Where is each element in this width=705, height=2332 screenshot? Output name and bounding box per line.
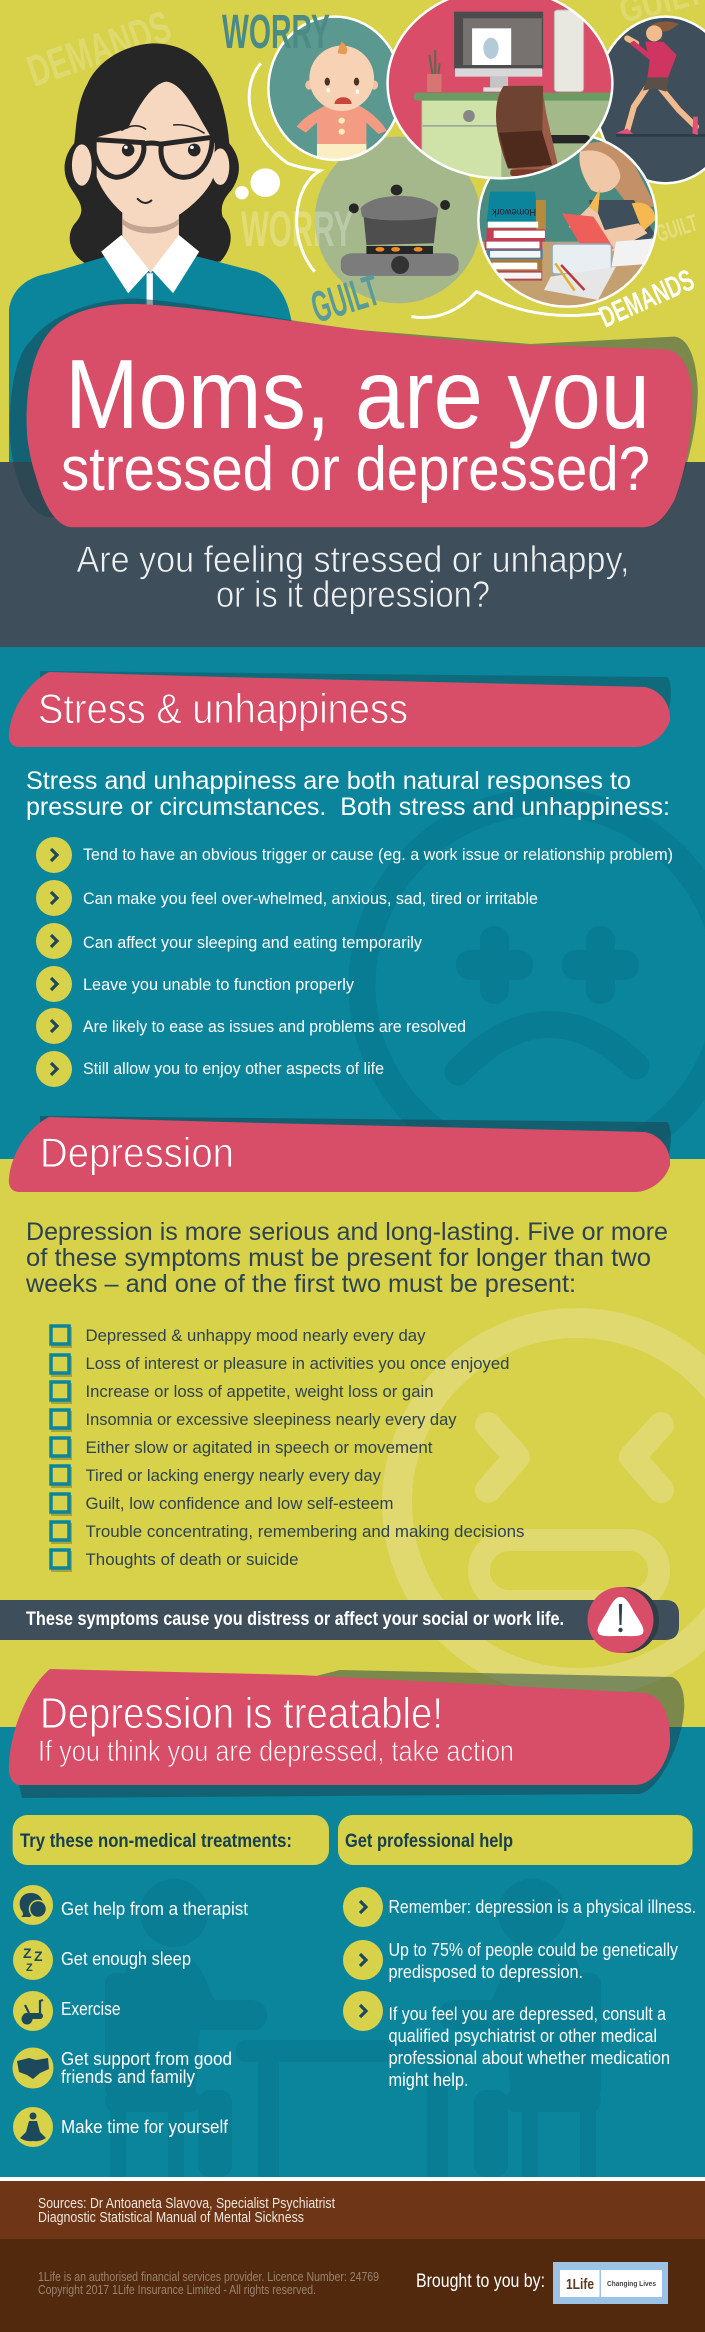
chair seat <box>499 131 552 168</box>
text: therapist: Get help from a therapist <box>61 1898 248 1919</box>
symptom items <box>86 1326 524 1569</box>
burner <box>341 253 459 276</box>
pot lid <box>361 196 438 220</box>
list: stress signs <box>36 837 673 1087</box>
open book <box>562 213 614 249</box>
footer: sources: Sources: Dr Antoaneta Slavova, Specialist Psychiatrist <box>38 2196 335 2212</box>
logo: 1Life <box>566 2276 594 2293</box>
chair back <box>496 85 558 172</box>
chevrons <box>51 849 57 1075</box>
palette on screen <box>483 38 499 59</box>
label: homework on book: Homework <box>491 206 536 217</box>
items <box>83 845 673 1078</box>
symptom items: Depressed & unhappy mood nearly every day <box>86 1326 426 1345</box>
symptom items: Increase or loss of appetite, weight loss or gain <box>86 1382 434 1401</box>
child arms <box>569 207 647 257</box>
ears <box>72 144 92 186</box>
items: Can make you feel over-whelmed, anxious, sad, tired or irritable <box>83 889 538 908</box>
logo <box>553 2262 668 2304</box>
sleeves <box>632 203 656 232</box>
intro text: depression: Depression is more serious and long-lasting. Five or more <box>26 1218 668 1246</box>
icon: handshake <box>12 2048 54 2088</box>
panel heading: professional help <box>338 1815 692 1865</box>
diaper <box>316 142 366 159</box>
help text: predisposed to depression. <box>388 1961 583 1982</box>
pot body <box>363 213 437 245</box>
pen cup <box>427 74 442 92</box>
bullets <box>36 837 72 1087</box>
panel: stress and unhappiness background <box>0 647 705 1159</box>
checklist: symptoms <box>51 1326 524 1572</box>
icon: exercise bike <box>13 1991 53 2031</box>
intro text: depression <box>25 1218 668 1298</box>
subtitle panel background <box>0 462 705 647</box>
intro text: stress <box>26 767 670 821</box>
thought dots <box>235 168 280 199</box>
intro text: depression: of these symptoms must be present for longer than two <box>26 1244 651 1272</box>
help text: If you feel you are depressed, consult a <box>388 2003 667 2024</box>
shorts <box>643 77 669 92</box>
checkboxes <box>51 1326 69 1568</box>
hero background <box>0 0 705 462</box>
collar <box>101 235 199 293</box>
symptom items: Insomnia or excessive sleepiness nearly every day <box>86 1410 457 1429</box>
footer: sources <box>0 2177 705 2239</box>
list: professional help <box>343 1887 696 2090</box>
icon: sleep: Z <box>23 1945 32 1961</box>
bubble: crying baby <box>268 17 401 162</box>
help text: might help. <box>388 2069 468 2090</box>
shirt <box>629 41 677 78</box>
child shirt <box>589 200 654 243</box>
thought bubble outline <box>249 63 600 318</box>
bullets <box>343 1887 383 2031</box>
panel: depression background <box>0 1159 705 1727</box>
tuft <box>338 42 347 54</box>
symptom items: Guilt, low confidence and low self-esteem <box>86 1494 394 1513</box>
word: guilt teal: GUILT <box>306 266 385 333</box>
illustration: mother and thought bubbles <box>9 0 705 500</box>
heading banner: stress and unhappiness <box>9 671 671 747</box>
intro text: stress: Stress and unhappiness are both natural responses to <box>26 767 631 795</box>
placket <box>147 273 153 307</box>
tablet and papers <box>552 244 611 274</box>
legal text: 1Life is an authorised financial services provider. Licence Number: 24769 <box>38 2269 379 2284</box>
text: exercise: Exercise <box>61 1998 120 2019</box>
items: Are likely to ease as issues and problems are resolved <box>83 1017 466 1036</box>
hair <box>647 21 679 40</box>
legal text <box>38 2269 379 2297</box>
list: non-medical treatments <box>12 1885 248 2147</box>
chevrons <box>360 1901 366 2017</box>
subtitle: or is it depression? <box>216 574 490 615</box>
mother figure <box>9 43 291 500</box>
help text: qualified psychiatrist or other medical <box>388 2025 657 2046</box>
symptom items: Either slow or agitated in speech or movement <box>86 1438 433 1457</box>
subheading text: If you think you are depressed, take action <box>38 1735 514 1768</box>
baby head <box>309 46 374 111</box>
title banner <box>10 298 698 527</box>
shirt <box>9 257 291 500</box>
top teal book <box>486 192 540 223</box>
subtitle <box>76 539 630 615</box>
bubble: runner <box>596 17 705 183</box>
eye highlights <box>124 146 194 149</box>
shoes <box>616 128 633 134</box>
child hair <box>580 142 656 207</box>
help text <box>388 1896 696 2090</box>
panel: treatment background <box>0 1727 705 2177</box>
sponsor text: Brought to you by: <box>416 2271 545 2292</box>
heading text: Stress & unhappiness <box>38 685 408 732</box>
logo: Changing Lives <box>607 2279 656 2288</box>
neck <box>122 207 179 273</box>
icon: meditation <box>13 2107 53 2147</box>
footer: legal and sponsor <box>0 2239 705 2332</box>
text: support: friends and family <box>61 2066 196 2087</box>
monitor <box>454 12 543 69</box>
desk body <box>421 100 502 178</box>
text: support <box>61 2048 232 2087</box>
hair <box>65 43 239 265</box>
icon: sleep <box>13 1940 53 1980</box>
text: sleep: Get enough sleep <box>61 1948 191 1969</box>
glasses <box>92 137 212 177</box>
symptom items: Trouble concentrating, remembering and making decisions <box>86 1522 524 1541</box>
symptom items: Thoughts of death or suicide <box>86 1550 298 1569</box>
icon: sleep: Z <box>26 1962 33 1974</box>
pencils <box>555 263 575 291</box>
panel heading: professional help: Get professional help <box>345 1831 513 1852</box>
chair arm <box>551 135 590 144</box>
runner head <box>646 25 662 41</box>
drawer knob <box>463 110 475 122</box>
text: support: Get support from good <box>61 2048 232 2069</box>
banner shape <box>10 298 698 527</box>
face <box>97 82 215 229</box>
watermark: sad face <box>362 802 705 1168</box>
neck shadow <box>122 218 179 233</box>
icon: therapist speech bubbles <box>13 1885 53 1925</box>
intro text: stress: pressure or circumstances. Both stress and unhappiness: <box>26 793 670 821</box>
child face <box>579 150 620 193</box>
title line 2: stressed or depressed? <box>61 435 650 504</box>
baby ears <box>305 80 311 90</box>
items: Still allow you to enjoy other aspects of life <box>83 1059 384 1078</box>
bubble: desk and computer <box>388 0 618 187</box>
eyebrows and mouth <box>121 125 205 203</box>
help text: professional about whether medication <box>388 2047 670 2068</box>
items: Can affect your sleeping and eating temporarily <box>83 933 422 952</box>
icon: sleep: Z <box>34 1948 43 1964</box>
eyes <box>122 144 201 156</box>
intro text: depression: weeks – and one of the first two must be present: <box>25 1270 576 1298</box>
flames <box>375 247 423 252</box>
callout text: These symptoms cause you distress or affect your social or work life. <box>26 1609 564 1630</box>
computer tower <box>554 10 584 92</box>
watermark: face with chevrons <box>397 1323 705 1683</box>
symptom items: Tired or lacking energy nearly every day <box>86 1466 381 1485</box>
baby body <box>297 106 387 144</box>
items: Tend to have an obvious trigger or cause (eg. a work issue or relationship problem) <box>83 845 673 864</box>
watermark: two people at a table <box>105 1879 601 2177</box>
bubble: cooking pot <box>315 137 481 303</box>
icon: warning <box>588 1587 659 1653</box>
desk top <box>414 93 616 101</box>
checkbox shadows <box>51 1327 72 1572</box>
book stack <box>486 228 545 242</box>
heading text: Depression <box>40 1129 234 1176</box>
text: make time: Make time for yourself <box>61 2116 229 2137</box>
ghost word: worry: WORRY <box>241 201 353 257</box>
table <box>482 242 642 306</box>
word: worry teal: WORRY <box>222 6 330 59</box>
heading banner: depression <box>9 1116 671 1192</box>
callout bar: distress <box>0 1587 679 1653</box>
footer: sources: Diagnostic Statistical Manual of Mental Sickness <box>38 2210 304 2226</box>
legal text: Copyright 2017 1Life Insurance Limited - All rights reserved. <box>38 2282 316 2297</box>
bubble: child reading <box>477 133 661 308</box>
monitor stand <box>490 77 508 87</box>
buttons <box>339 118 345 124</box>
subtitle: Are you feeling stressed or unhappy, <box>76 539 630 580</box>
ground <box>616 134 705 137</box>
symptom items: Loss of interest or pleasure in activities you once enjoyed <box>86 1354 510 1373</box>
runner limbs <box>627 38 696 131</box>
heading banner: depression is treatable <box>9 1669 684 1798</box>
title line 1: Moms, are you <box>65 339 650 449</box>
panel heading: non-medical treatments: Try these non-medical treatments: <box>20 1831 292 1852</box>
items: Leave you unable to function properly <box>83 975 354 994</box>
heading text: Depression is treatable! <box>40 1689 443 1738</box>
baby eyes, tears, mouth <box>325 78 330 86</box>
panel heading: non-medical treatments <box>13 1815 329 1865</box>
